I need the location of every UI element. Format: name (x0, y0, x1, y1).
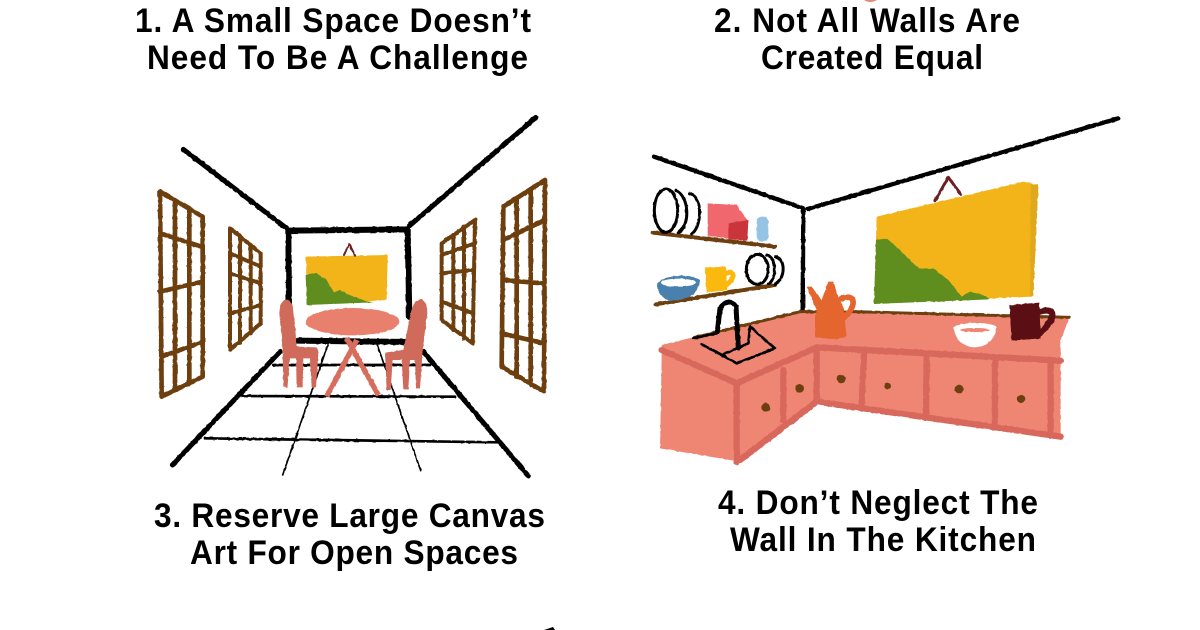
heading: tip 4: Wall In The Kitchen (730, 520, 1036, 558)
yellow mug (705, 267, 733, 293)
chair: left (279, 299, 318, 388)
plates: upper shelf (654, 189, 700, 234)
orange kettle (807, 282, 853, 339)
shelves (653, 233, 775, 304)
heading: tip 2 (714, 1, 1020, 76)
heading: tip 3 (154, 496, 545, 571)
illustration: kitchen corner (653, 118, 1118, 462)
heading: tip 2: 2. Not All Walls Are (714, 1, 1020, 39)
illustration: dining room in perspective (160, 117, 545, 476)
heading: tip 4 (718, 483, 1038, 558)
wall painting (306, 244, 388, 305)
heading: tip 3: Art For Open Spaces (190, 533, 518, 571)
blue bowl (657, 276, 700, 301)
heading: tip 1: 1. A Small Space Doesn’t (135, 1, 531, 39)
table top (306, 308, 399, 335)
heading: tip 2: Created Equal (761, 38, 983, 76)
cabinet trim (662, 347, 1061, 462)
cropped fragment: bottom edge (544, 627, 555, 630)
wall lines (654, 118, 1118, 310)
table legs (327, 338, 378, 397)
window: far left (160, 192, 203, 397)
heading: tip 4: 4. Don’t Neglect The (718, 483, 1038, 521)
dark red mug (1009, 303, 1052, 341)
window: far right (502, 180, 545, 392)
cabinet body (660, 312, 1070, 462)
countertop back edge (695, 312, 1069, 337)
cabinet knobs (761, 375, 1025, 412)
wall painting (874, 177, 1038, 304)
heading: tip 1: Need To Be A Challenge (147, 38, 528, 76)
window: inner left (230, 228, 261, 350)
blue bottle (757, 217, 768, 242)
white bowl (953, 323, 997, 347)
cropped fragment: top edge (864, 0, 877, 2)
red box (708, 203, 748, 241)
room outline (172, 117, 536, 476)
sink and faucet (693, 302, 775, 363)
window: inner right (442, 220, 475, 343)
heading: tip 1 (135, 1, 531, 76)
plates: lower shelf (746, 254, 783, 284)
heading: tip 3: 3. Reserve Large Canvas (154, 496, 545, 534)
chair: right (385, 299, 427, 390)
